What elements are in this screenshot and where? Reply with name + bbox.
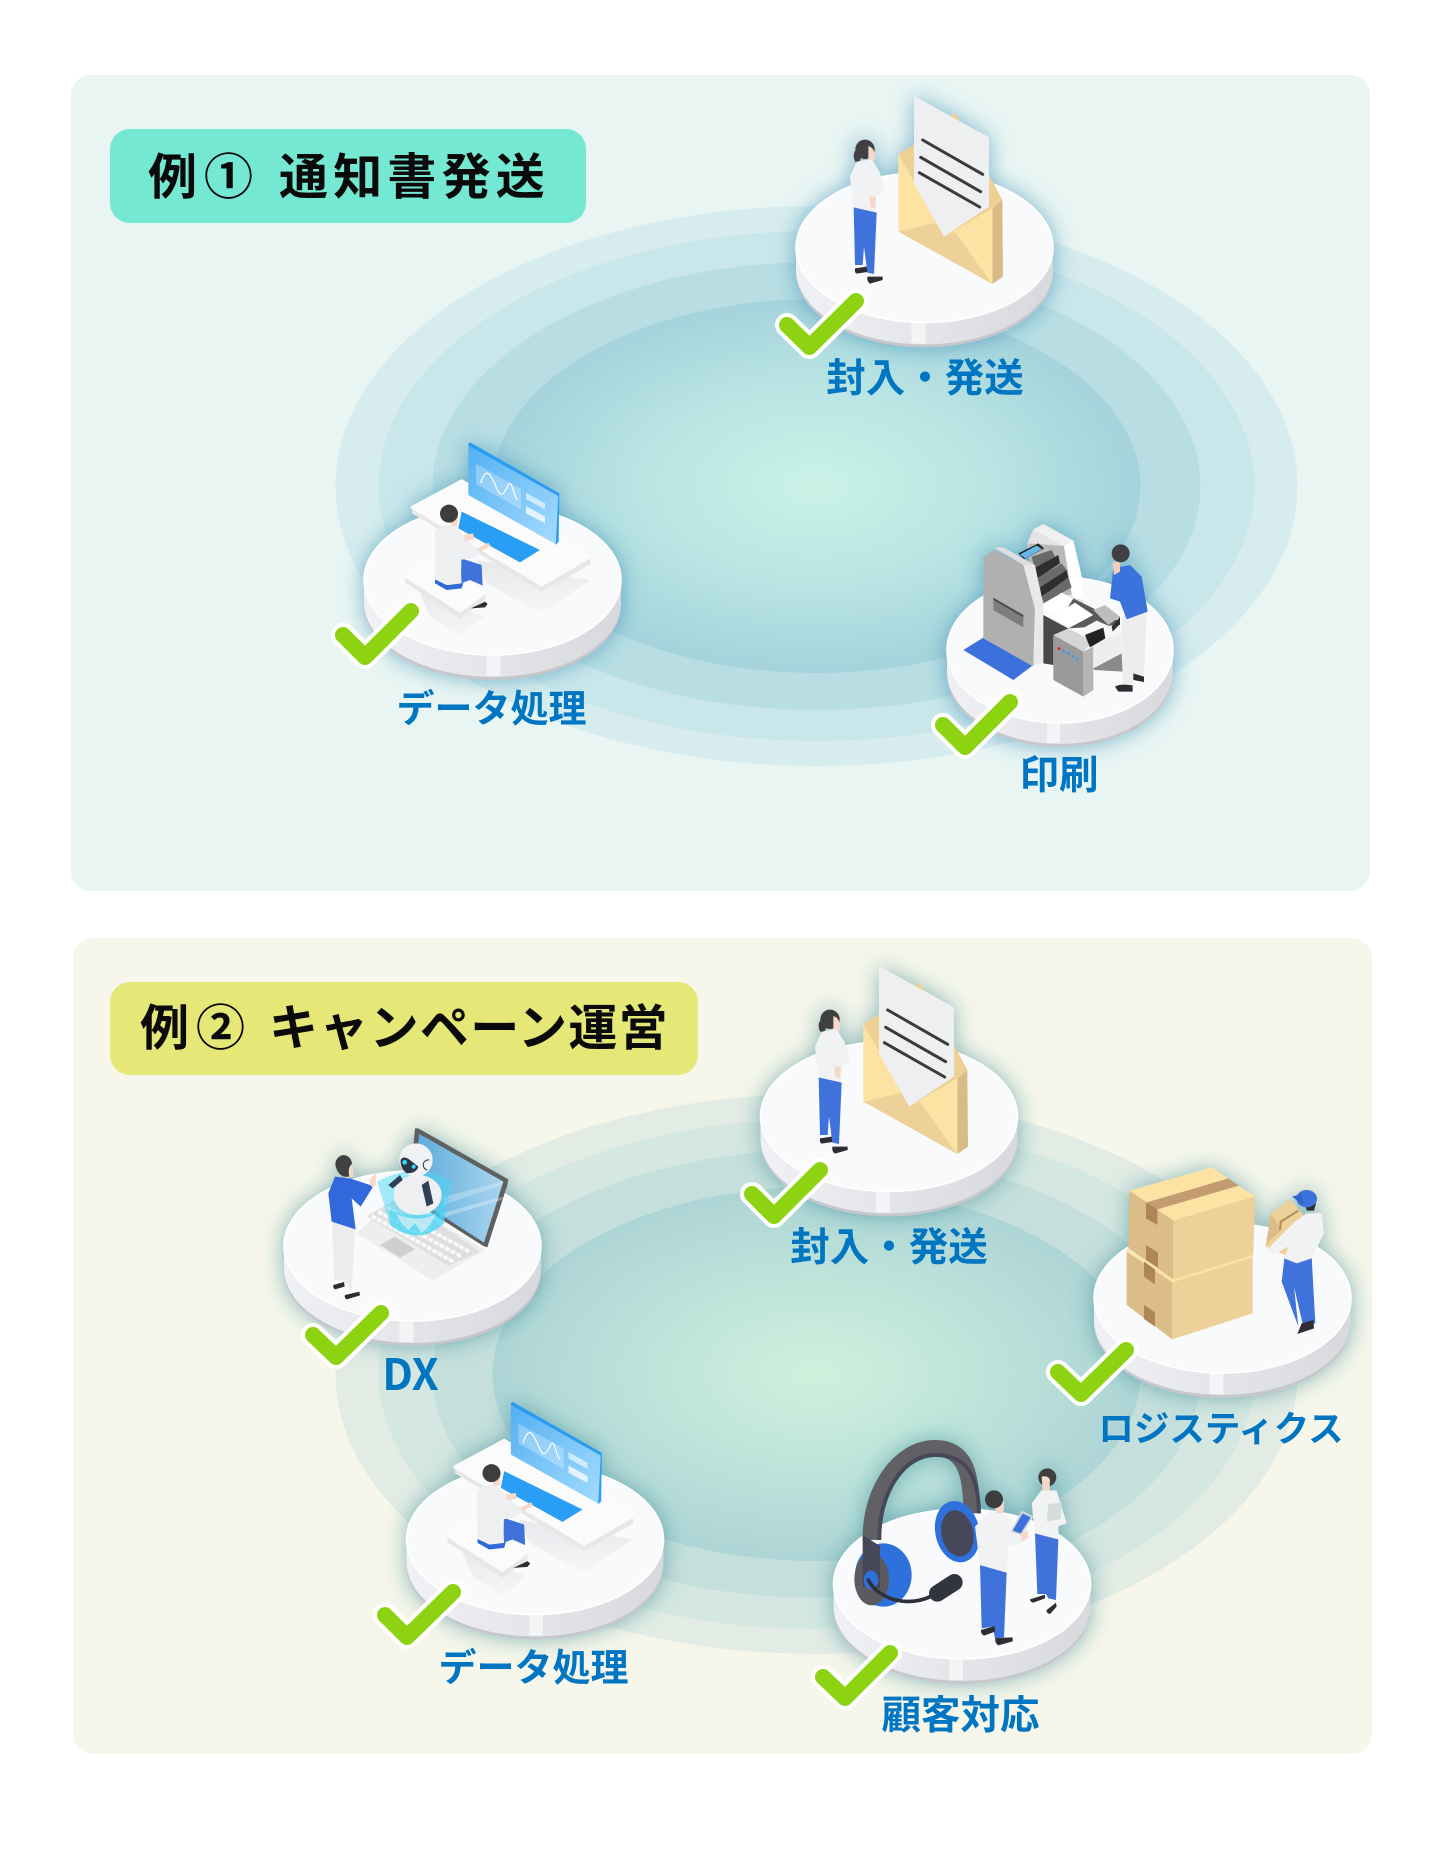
step: ロジスティクス	[1058, 1167, 1351, 1449]
label: ロジスティクス	[1098, 1409, 1344, 1449]
platform with laptop, robot and woman	[284, 1128, 541, 1346]
platform with desk and man	[406, 1402, 664, 1640]
check mark	[313, 1313, 381, 1357]
label: データ処理	[438, 1647, 629, 1690]
heading: 例① 通知書発送	[110, 129, 586, 223]
platform with printing press and man	[947, 524, 1173, 747]
platform with boxes and delivery man	[1094, 1167, 1351, 1398]
heading: 例② キャンペーン運営	[110, 982, 698, 1075]
panel: example 1	[71, 75, 1370, 891]
heading: 例① 通知書発送: 通知書発送	[279, 151, 550, 205]
step: 封入・発送	[787, 96, 1053, 401]
check mark	[343, 611, 411, 657]
label: 封入・発送	[790, 1226, 988, 1270]
platform with desk and man	[364, 443, 621, 680]
step: 封入・発送	[752, 966, 1018, 1270]
label: 顧客対応	[882, 1694, 1040, 1738]
check mark	[787, 301, 856, 347]
check mark	[943, 702, 1010, 747]
heading: 例① 通知書発送: 例①	[148, 151, 260, 205]
label: 封入・発送	[826, 357, 1024, 401]
check mark	[823, 1653, 890, 1698]
check mark	[752, 1170, 820, 1216]
platform with envelope and woman	[796, 96, 1053, 347]
step: DX	[284, 1128, 541, 1403]
heading: 例② キャンペーン運営: キャンペーン運営	[269, 1002, 669, 1056]
label: DX	[382, 1341, 439, 1403]
concentric rings background	[336, 206, 1298, 766]
label: データ処理	[396, 688, 587, 731]
step: 印刷	[943, 524, 1173, 798]
check mark	[1058, 1350, 1126, 1394]
platform with headset and two people	[834, 1448, 1090, 1684]
heading: 例② キャンペーン運営: 例②	[140, 1002, 252, 1056]
step: データ処理	[385, 1402, 664, 1690]
concentric rings background	[336, 1094, 1298, 1654]
step: 顧客対応	[823, 1448, 1090, 1738]
label: 印刷	[1020, 754, 1098, 798]
step: データ処理	[343, 443, 621, 731]
platform with envelope and woman	[760, 966, 1018, 1216]
panel: example 2	[73, 938, 1372, 1754]
check mark	[385, 1592, 453, 1637]
